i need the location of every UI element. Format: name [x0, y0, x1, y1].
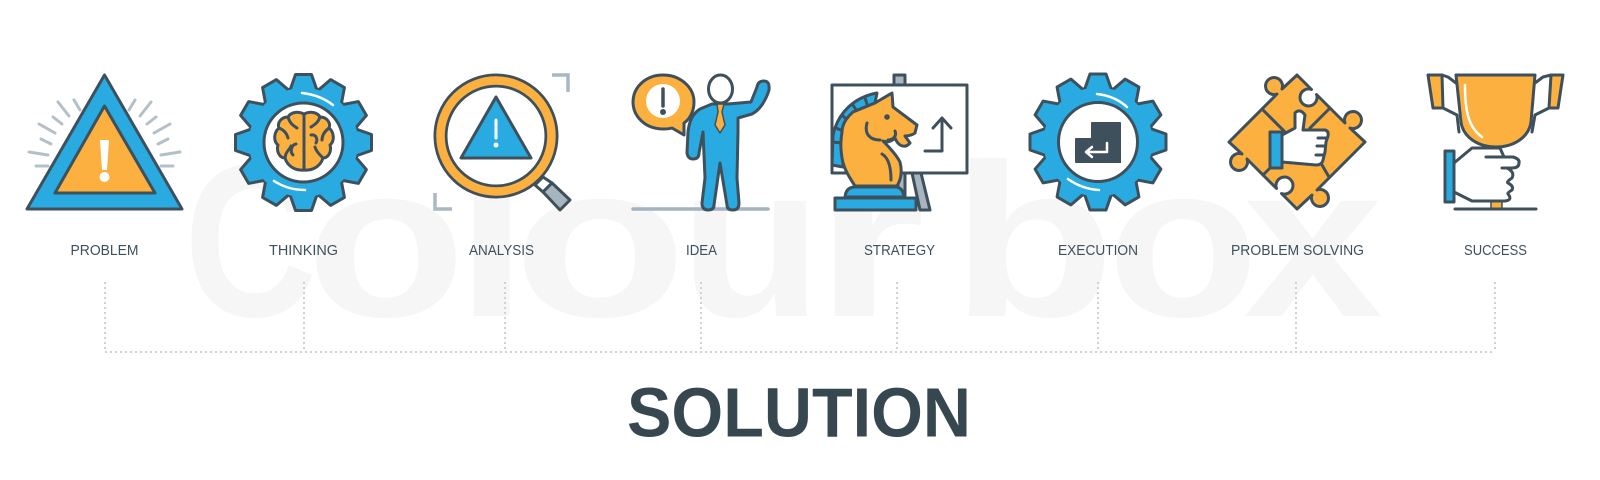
label: problem solving: PROBLEM SOLVING: [1231, 243, 1364, 259]
watermark: [184, 120, 1383, 363]
label: strategy: STRATEGY: [864, 243, 935, 259]
icon: execution gear: [1030, 74, 1166, 210]
label: execution: EXECUTION: [1058, 243, 1138, 259]
dotted connector: [105, 282, 1495, 352]
icon: idea person with speech bubble: [633, 75, 769, 210]
heading: solution: SOLUTION: [627, 374, 971, 452]
label: analysis: ANALYSIS: [469, 243, 534, 259]
watermark: x: [1243, 120, 1383, 363]
watermark: C: [184, 120, 317, 363]
icon: problem warning triangle: [27, 75, 182, 209]
label: idea: IDEA: [686, 243, 717, 259]
watermark: r: [815, 120, 925, 363]
label: success: SUCCESS: [1464, 243, 1527, 259]
icon: problem solving puzzle and thumbs up: [1229, 75, 1365, 209]
icon: strategy chess knight and board: [832, 75, 967, 210]
icon: success trophy in hand: [1428, 75, 1563, 209]
label: problem: PROBLEM: [70, 243, 138, 259]
label: thinking: THINKING: [269, 243, 338, 259]
icon: analysis magnifier: [435, 75, 570, 210]
watermark: l: [456, 120, 528, 363]
watermark: u: [680, 120, 822, 363]
watermark: o: [1107, 120, 1259, 363]
icon: thinking gear with brain: [236, 74, 372, 210]
watermark: b: [951, 120, 1115, 363]
watermark: o: [306, 120, 466, 363]
watermark: o: [513, 120, 687, 363]
